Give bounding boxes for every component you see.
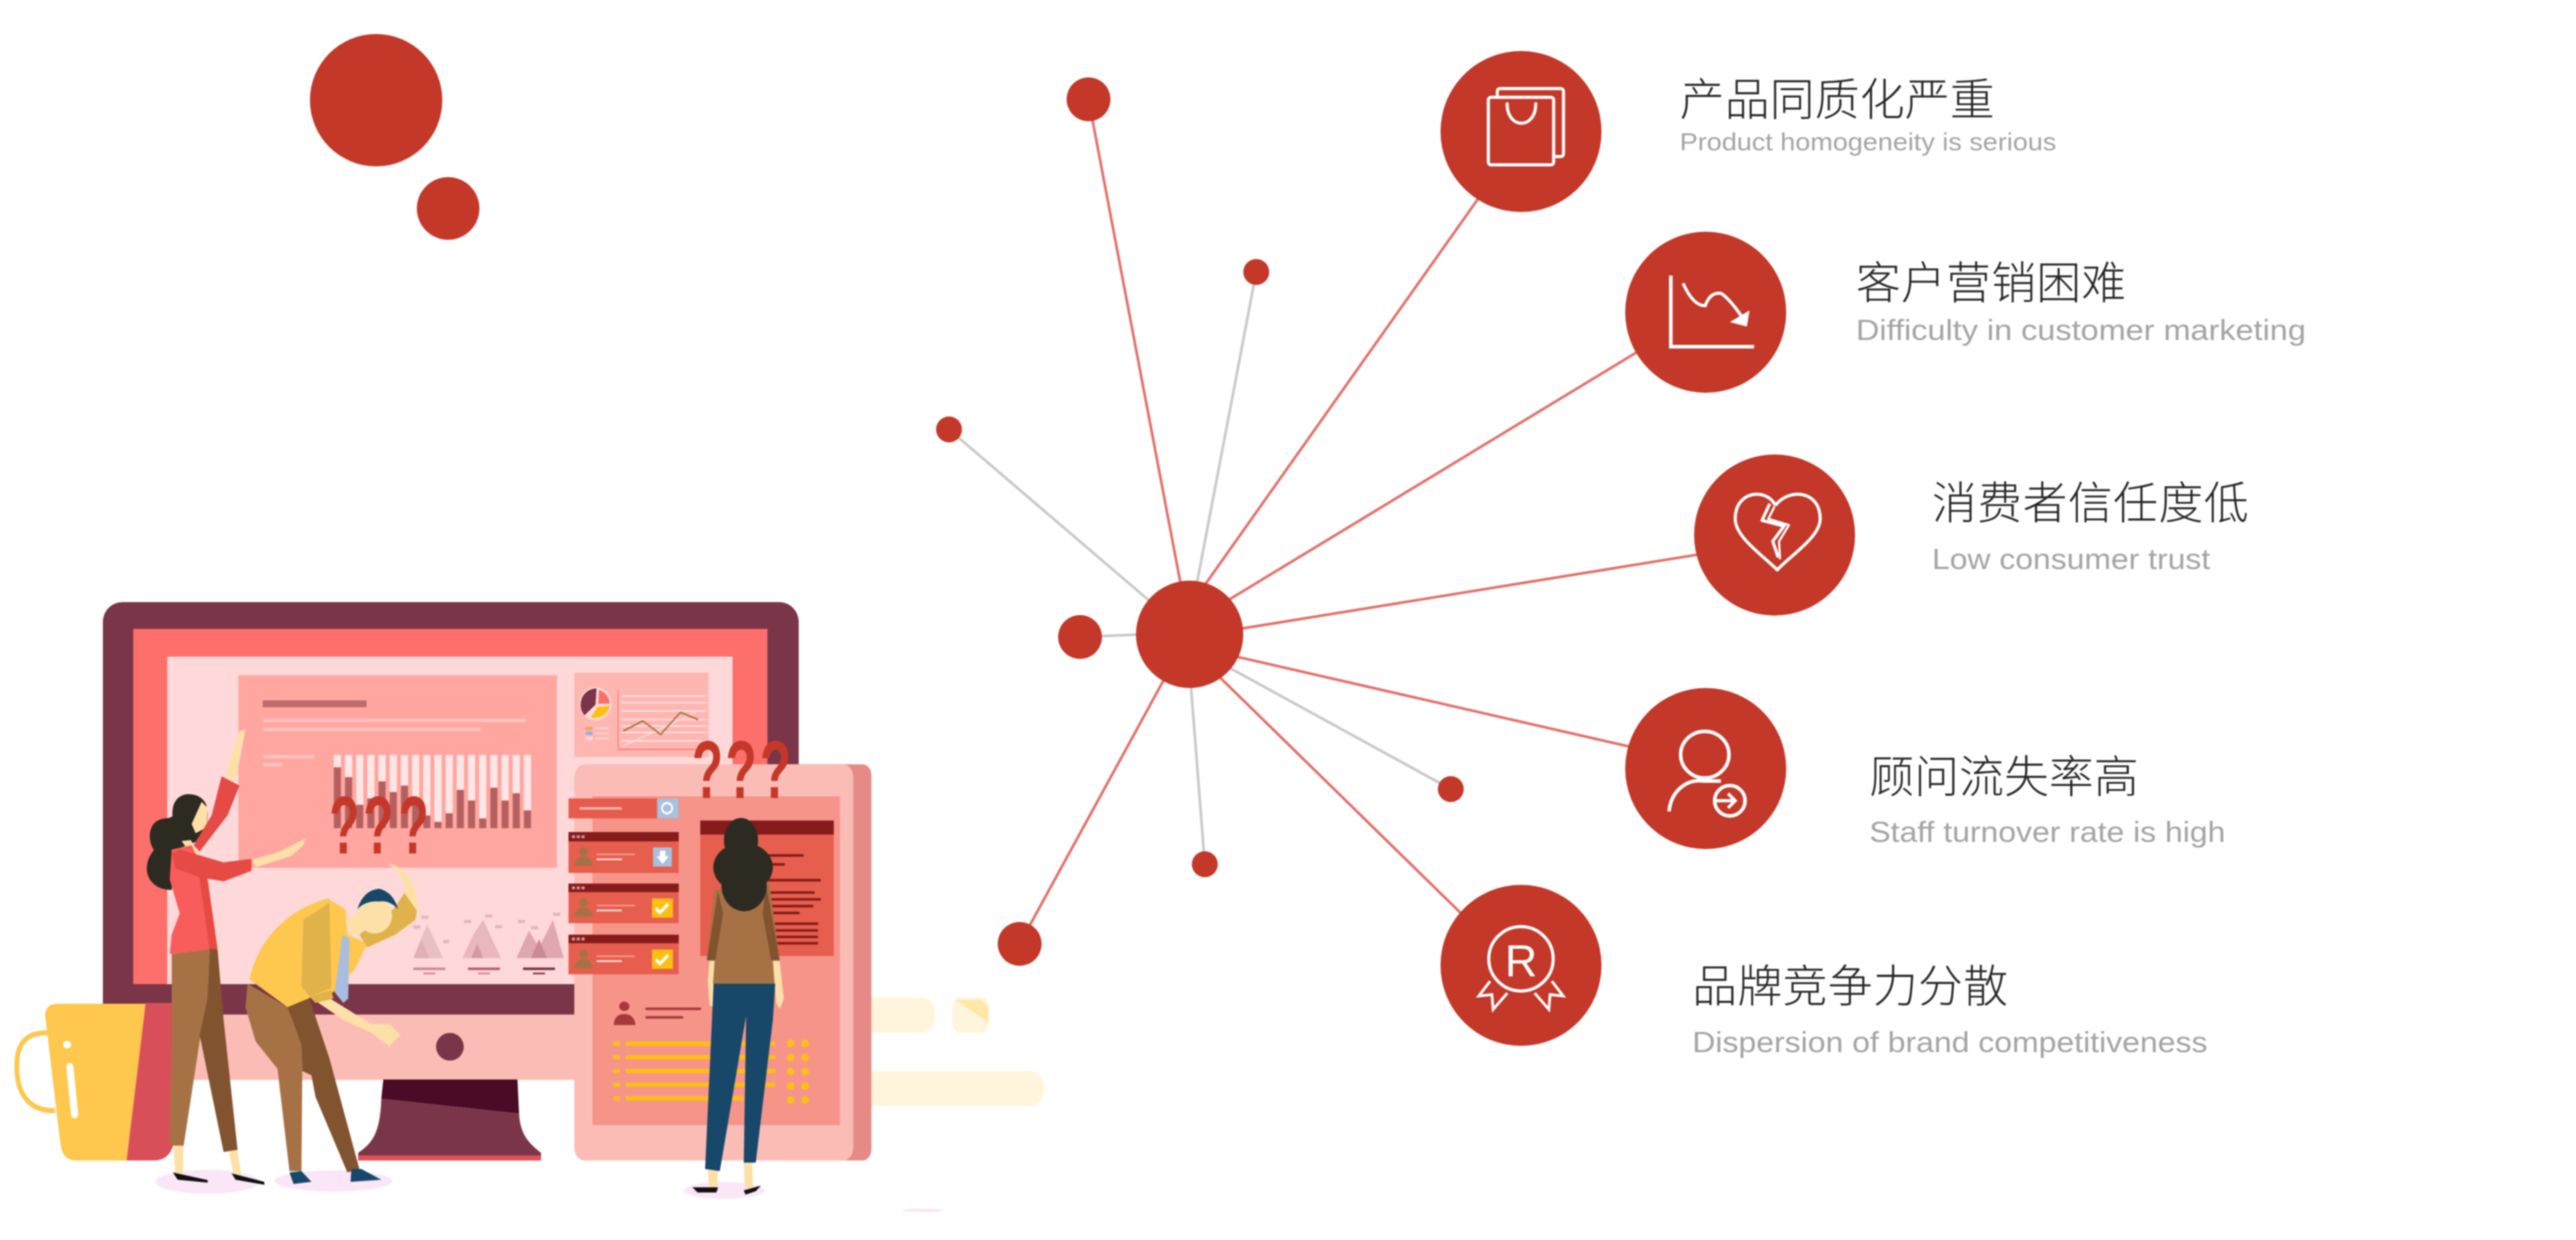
pie and line chart panel xyxy=(574,673,708,757)
shoes xyxy=(290,1171,311,1184)
question marks over chart xyxy=(329,780,428,872)
decorative circles top left xyxy=(309,34,479,240)
grey connectors xyxy=(949,272,1451,864)
icon: broken heart xyxy=(1735,494,1820,570)
heading: 消费者信任度低 xyxy=(1932,479,2249,529)
satellite dots xyxy=(936,77,1463,966)
shirt xyxy=(250,898,368,1007)
shadow xyxy=(684,1182,765,1199)
red connectors xyxy=(1020,99,1775,972)
question marks over tablet: ? xyxy=(692,725,723,816)
item 4: staff turnover xyxy=(1625,688,2225,849)
tablet body xyxy=(574,764,853,1160)
heading: 品牌竞争力分散 xyxy=(1692,962,2008,1012)
heading: 客户营销困难 xyxy=(1856,259,2126,309)
document panel xyxy=(700,820,834,956)
list card 3 xyxy=(569,935,679,974)
item 2: customer marketing xyxy=(1625,232,2306,393)
head and hair xyxy=(357,897,392,933)
shoes xyxy=(692,1187,718,1193)
icon: user leaving xyxy=(1669,732,1745,816)
monitor screen inner xyxy=(167,657,733,984)
monitor chin xyxy=(103,1015,640,1080)
item 5: brand competitiveness xyxy=(1440,885,2207,1058)
neck xyxy=(347,913,368,935)
icon: shopping bags xyxy=(1488,89,1563,165)
icon circle xyxy=(1625,688,1786,849)
question marks over tablet: ? xyxy=(760,725,791,816)
raised arm xyxy=(360,892,417,947)
shoes xyxy=(173,1172,208,1183)
heading: 产品同质化严重 xyxy=(1680,75,1995,125)
hair xyxy=(147,794,208,890)
hair xyxy=(713,818,773,912)
icon: falling chart xyxy=(1671,276,1754,347)
subtitle: Staff turnover rate is high xyxy=(1869,816,2225,848)
bar backgrounds xyxy=(334,755,531,828)
jeans xyxy=(705,984,775,1171)
yellow data lines xyxy=(613,1040,809,1104)
profile row xyxy=(614,1002,701,1025)
tablet panel xyxy=(569,764,871,1160)
top xyxy=(707,884,780,984)
question marks over tablet: ? xyxy=(725,725,757,816)
monitor frame xyxy=(103,602,799,1074)
tablet inner panel xyxy=(592,796,840,1125)
shadow xyxy=(275,1170,393,1192)
icon circle xyxy=(1625,232,1786,393)
list card 1 xyxy=(569,832,679,873)
tablet edge xyxy=(776,764,871,1160)
icon: registered badge xyxy=(1479,927,1563,1009)
icon: coffee mug xyxy=(17,1003,174,1160)
item 3: consumer trust xyxy=(1694,454,2249,616)
legs xyxy=(708,1169,718,1188)
icon circle xyxy=(1440,51,1601,212)
lower arm xyxy=(316,994,401,1047)
question marks over tablet xyxy=(692,725,791,816)
hands xyxy=(708,961,784,1009)
heading: 顾问流失率高 xyxy=(1869,752,2139,803)
figure: confused man xyxy=(246,863,418,1192)
legs xyxy=(174,1145,183,1177)
figure: woman pointing xyxy=(147,729,305,1193)
icon circle xyxy=(1694,454,1855,616)
question marks over chart: ? xyxy=(399,780,428,872)
face and raised hand xyxy=(182,729,305,868)
question marks over chart: ? xyxy=(329,780,360,872)
arms xyxy=(172,777,251,881)
tie xyxy=(335,935,350,1003)
subtitle: Dispersion of brand competitiveness xyxy=(1692,1026,2207,1058)
monitor stand xyxy=(358,1080,541,1160)
trousers xyxy=(246,984,302,1171)
question marks over chart: ? xyxy=(363,780,394,872)
monitor screen outer xyxy=(133,629,767,984)
bars xyxy=(334,768,531,828)
monitor xyxy=(103,602,799,1080)
item 1: product homogeneity xyxy=(1440,51,2056,212)
line chart xyxy=(618,690,706,750)
connector lines xyxy=(949,99,1775,972)
bar chart panel xyxy=(239,675,557,868)
icon: registered badge: R xyxy=(1504,937,1538,987)
list card 2 xyxy=(569,884,679,923)
yellow streaks behind tablet xyxy=(827,998,1044,1212)
monitor button xyxy=(436,1032,463,1061)
subtitle: Low consumer trust xyxy=(1932,543,2210,575)
icon circle xyxy=(1440,885,1601,1046)
hub circle xyxy=(1136,581,1243,688)
shadow xyxy=(156,1170,259,1193)
subtitle: Difficulty in customer marketing xyxy=(1856,314,2306,346)
figure: woman from behind xyxy=(684,818,784,1199)
small mountain charts xyxy=(413,913,564,974)
pie chart xyxy=(580,687,612,740)
torso xyxy=(170,845,217,954)
search bar xyxy=(569,798,679,819)
subtitle: Product homogeneity is serious xyxy=(1680,128,2056,156)
